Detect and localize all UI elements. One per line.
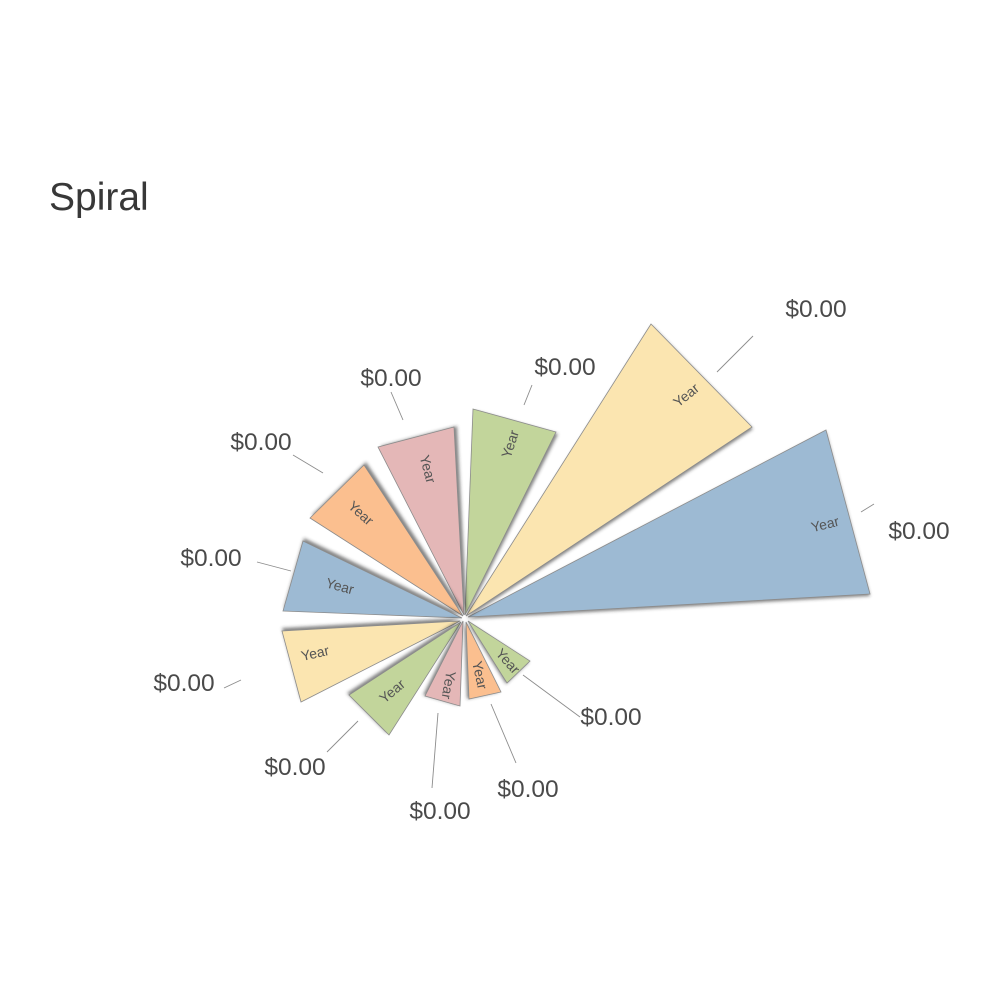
wedge: left yellow	[282, 618, 460, 702]
value: large yellow: $0.00	[785, 296, 847, 323]
wedge: small orange	[464, 622, 501, 699]
value: small green	[523, 675, 642, 731]
value: orange	[230, 429, 323, 473]
value: large yellow	[717, 296, 847, 372]
wedge: upper green	[465, 409, 558, 615]
wedge: upper green: Year	[498, 428, 522, 460]
value: orange: $0.00	[230, 429, 292, 456]
value: large blue	[861, 504, 950, 545]
wedge: lower-left green	[347, 620, 461, 735]
wedge: small orange: Year	[469, 659, 491, 691]
wedge: left yellow: Year	[299, 642, 331, 664]
value: upper green: $0.00	[534, 354, 596, 381]
value: small orange	[491, 704, 559, 803]
wedge: upper pink	[378, 426, 467, 615]
wedge: left blue	[283, 538, 463, 618]
value: lower-left green	[264, 721, 358, 781]
value: left yellow	[153, 670, 241, 697]
value: large blue: $0.00	[888, 518, 950, 545]
value: left blue	[180, 545, 291, 572]
wedge: small pink	[423, 620, 463, 706]
value: left yellow: $0.00	[153, 670, 215, 697]
wedge: large blue	[468, 430, 870, 619]
value: small pink	[409, 713, 471, 825]
wedge: large blue: Year	[809, 513, 841, 535]
wedge: lower-left green: Year	[376, 676, 408, 706]
value: upper pink: $0.00	[360, 365, 422, 392]
value: upper pink	[360, 365, 422, 420]
wedge: large yellow: Year	[670, 380, 702, 410]
wedge: small pink: Year	[439, 670, 459, 701]
wedge: orange: Year	[345, 498, 377, 529]
wedge: small green	[467, 621, 530, 684]
value: small pink: $0.00	[409, 798, 471, 825]
wedge: left blue: Year	[324, 575, 356, 597]
value: lower-left green: $0.00	[264, 754, 326, 781]
wedge: small green: Year	[493, 645, 524, 677]
wedge: large yellow	[466, 324, 753, 618]
value: small orange: $0.00	[497, 776, 559, 803]
title: Spiral	[49, 176, 149, 219]
value: small green: $0.00	[580, 704, 642, 731]
value: left blue: $0.00	[180, 545, 242, 572]
wedge: upper pink: Year	[417, 453, 439, 485]
wedge: orange	[310, 462, 465, 616]
value: upper green	[524, 354, 596, 405]
